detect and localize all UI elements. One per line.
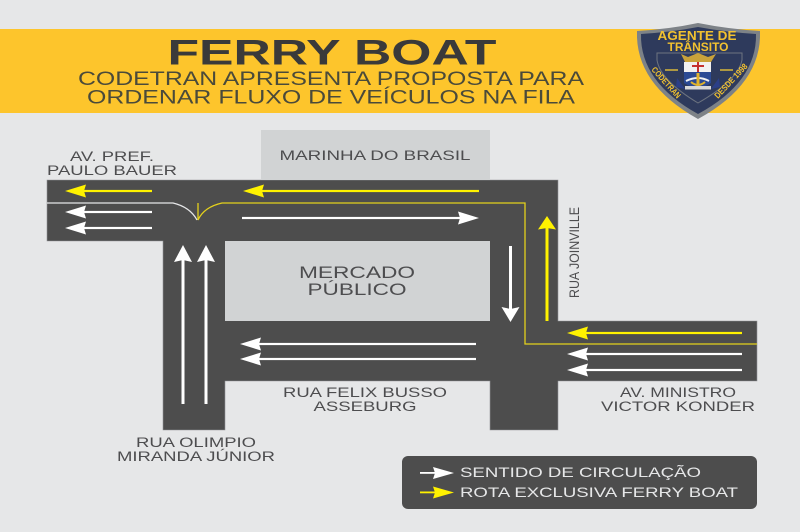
label: rua olimpio miranda júnior <box>117 435 275 464</box>
icon: agente de trânsito badge <box>637 23 760 119</box>
label: av. pref. paulo bauer <box>47 149 177 178</box>
legend <box>402 456 757 509</box>
icon: agente de trânsito badge: CODETRAN <box>650 65 683 100</box>
label: av. ministro victor konder: VICTOR KONDER <box>601 399 755 414</box>
label: rua felix busso asseburg <box>283 385 447 414</box>
header band <box>0 29 800 113</box>
title: FERRY BOAT <box>168 32 497 72</box>
icon: agente de trânsito badge: DESDE 1998 <box>712 61 750 100</box>
label: rua olimpio miranda júnior: MIRANDA JÚNIOR <box>117 449 275 464</box>
panel: marinha do brasil: MARINHA DO BRASIL <box>280 148 471 163</box>
label: av. pref. paulo bauer: AV. PREF. <box>70 149 154 164</box>
arrows: white circulation <box>65 206 742 404</box>
label: rua felix busso asseburg: ASSEBURG <box>314 399 416 414</box>
label: rua joinville: RUA JOINVILLE <box>567 207 582 298</box>
road network <box>47 180 757 430</box>
legend arrow: white <box>420 467 454 479</box>
label: av. ministro victor konder: AV. MINISTRO <box>620 385 736 400</box>
subtitle <box>78 69 584 108</box>
subtitle: CODETRAN APRESENTA PROPOSTA PARA <box>78 69 584 90</box>
panel: mercado público: PÚBLICO <box>308 280 407 299</box>
label: rua olimpio miranda júnior: RUA OLIMPIO <box>136 435 256 450</box>
label: av. pref. paulo bauer: PAULO BAUER <box>47 163 177 178</box>
legend arrow: yellow <box>420 486 454 498</box>
panel: marinha do brasil <box>261 130 490 180</box>
legend: SENTIDO DE CIRCULAÇÃO <box>460 464 701 480</box>
legend: ROTA EXCLUSIVA FERRY BOAT <box>460 484 739 500</box>
label: av. ministro victor konder <box>601 385 755 414</box>
icon: agente de trânsito badge: TRÂNSITO <box>668 41 729 54</box>
icon: agente de trânsito badge: AGENTE DE <box>658 29 736 43</box>
panel: mercado público <box>225 241 490 321</box>
subtitle: ORDENAR FLUXO DE VEÍCULOS NA FILA <box>87 88 575 108</box>
arrows: yellow route <box>65 184 742 340</box>
label: rua felix busso asseburg: RUA FELIX BUSSO <box>283 385 447 400</box>
yellow exclusive route line <box>198 203 757 344</box>
panel: mercado público: MERCADO <box>299 264 415 282</box>
white dividing line <box>47 203 197 220</box>
